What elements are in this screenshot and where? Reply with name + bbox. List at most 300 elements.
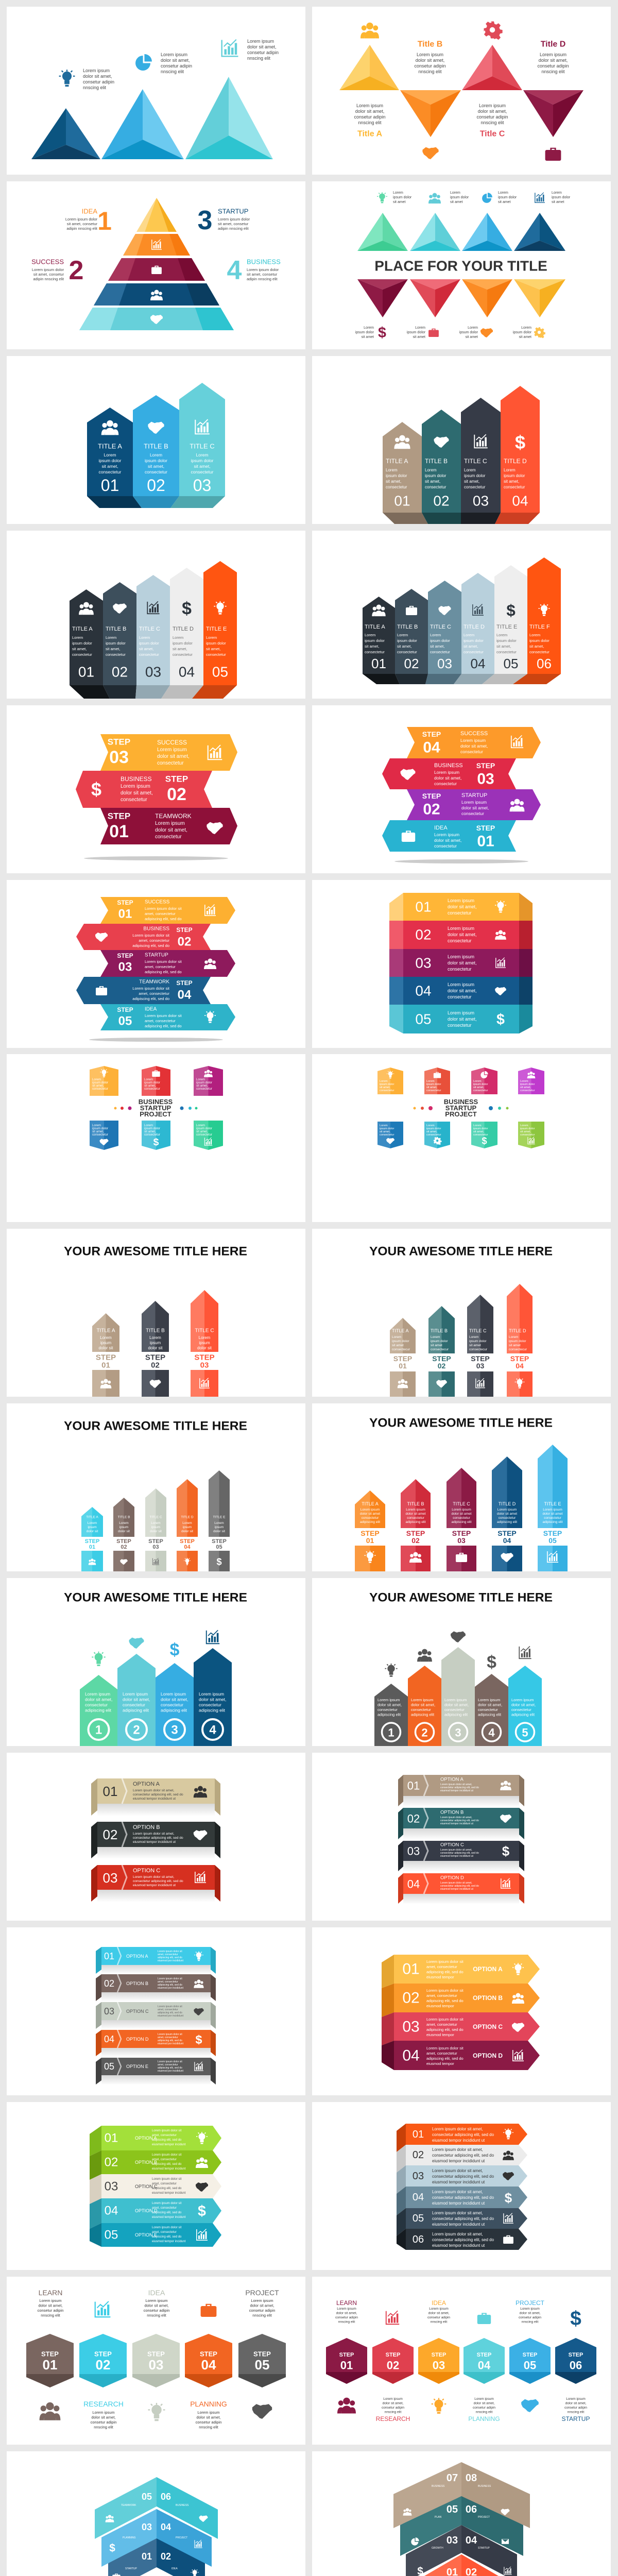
- column contents: 01: [78, 664, 94, 680]
- panel: 6 arrow columns: [312, 531, 611, 699]
- top icons row: ipsum dolor: [552, 196, 571, 199]
- chevron option E: 05: [105, 2228, 118, 2242]
- chevron 02: 02: [413, 2149, 424, 2161]
- column contents: 03: [473, 493, 489, 509]
- label 1 idea: sit amet, consetur: [67, 222, 97, 226]
- step arrows: dolor sit: [148, 1346, 163, 1350]
- bottom labels: nnscing elit: [199, 2425, 219, 2429]
- band step 01: 01: [477, 833, 494, 850]
- columns: [80, 1648, 232, 1746]
- panel: stacked blocks 01-05: [312, 880, 611, 1048]
- text B: Lorem ipsum: [417, 52, 443, 57]
- column contents: Lorem: [464, 633, 474, 637]
- layer 05/06 teal: 05: [447, 2504, 458, 2515]
- chevron option D: Lorem ipsum dolor sit: [152, 2202, 182, 2205]
- ribbon option E: eiusmod por incididunt: [158, 2070, 184, 2073]
- ribbon option B: [398, 1808, 524, 1839]
- top labels: dolor sit amet,: [336, 2311, 357, 2315]
- bottom tabs: consectetur: [426, 1133, 441, 1137]
- band step 04: consectetur: [460, 749, 483, 754]
- bottom tabs: consectetur: [92, 1133, 108, 1137]
- up triangles: [357, 213, 565, 251]
- layer 03/04 blue: 03: [142, 2522, 152, 2532]
- step labels: STEP: [510, 1354, 529, 1363]
- step labels: 01: [399, 1362, 407, 1370]
- hexagons: STEP: [477, 2352, 491, 2358]
- band step 02: $: [91, 779, 101, 800]
- band step 02: amet, consectetur: [139, 938, 169, 943]
- top tabs: [377, 1067, 544, 1094]
- chevron option B: eiusmod tempor incidunt: [152, 2167, 186, 2171]
- column contents: ipsum dolor: [72, 641, 92, 645]
- step labels: 02: [151, 1361, 160, 1369]
- bottom tabs: Lorem: [473, 1124, 482, 1127]
- band step 03: STEP: [108, 737, 130, 747]
- top labels: LEARN: [336, 2299, 357, 2307]
- columns: [374, 1647, 542, 1746]
- column contents: 02: [404, 656, 419, 671]
- step arrows: consectetur: [453, 1516, 471, 1520]
- panel: three pyramids: [7, 7, 305, 175]
- column contents: 04: [179, 664, 195, 680]
- top tabs: consectetur: [380, 1089, 394, 1092]
- step arrows: dolor sit: [87, 1529, 98, 1533]
- top tabs: ipsum dolor: [520, 1083, 535, 1086]
- step arrows: ipsum: [199, 1341, 210, 1345]
- step arrows: Lorem ipsum: [497, 1507, 517, 1512]
- column contents: ipsum dolor: [365, 638, 385, 643]
- top labels: PROJECT: [516, 2299, 545, 2307]
- band step 03: consectetur: [157, 760, 184, 766]
- icon blocks: [355, 1546, 568, 1571]
- top icons row: sit amet: [552, 200, 564, 204]
- center title: STARTUP: [140, 1104, 171, 1112]
- band step 01: IDEA: [434, 825, 448, 831]
- pyramid top: [136, 198, 177, 232]
- label 4 business: Lorem ipsum dolor: [247, 267, 279, 272]
- top icons row: sit amet: [393, 200, 406, 204]
- chevron option D: amet, consectetur: [426, 2050, 457, 2056]
- bottom tabs: ipsum dolor: [92, 1127, 108, 1130]
- step arrows: ipsum: [100, 1341, 112, 1345]
- step arrows: dolor sit: [150, 1529, 162, 1533]
- band step 05: IDEA: [145, 1007, 157, 1012]
- step labels: 03: [476, 1362, 484, 1370]
- step labels: STEP: [212, 1538, 227, 1545]
- step labels: 04: [503, 1536, 511, 1545]
- column contents: consectetur: [365, 649, 385, 654]
- columns: Lorem ipsum: [123, 1691, 148, 1697]
- step arrows: sit amet: [469, 1344, 481, 1347]
- chevron option B: 02: [402, 1990, 420, 2006]
- band step 02: Lorem ipsum: [121, 783, 150, 789]
- top icons row: [377, 191, 571, 204]
- band step 02: dolor sit amet,: [121, 790, 153, 795]
- panel: 3 arrow columns: [7, 356, 305, 524]
- bottom icons row: ipsum dolor: [459, 331, 478, 334]
- panel: awesome title 4 steps: [312, 1229, 611, 1397]
- step labels: 02: [411, 1536, 420, 1545]
- panel: layered pyramid 1-4: [7, 181, 305, 349]
- ribbon option E: Lorem ipsum dolor sit: [158, 2060, 182, 2063]
- dots: [413, 1106, 509, 1110]
- step labels: STEP: [432, 1354, 451, 1363]
- column contents: sit amet,: [139, 646, 153, 651]
- column contents: Lorem: [196, 452, 209, 457]
- hexagons: STEP: [569, 2352, 583, 2358]
- band step 01: TEAMWORK: [155, 812, 192, 820]
- column contents: consectetur: [145, 469, 167, 474]
- hexagons: 04: [201, 2357, 216, 2372]
- layer 05/06 teal: PROJECT: [478, 2516, 490, 2519]
- bottom labels: nnscing elit: [568, 2410, 584, 2414]
- band step 02: dolor sit amet,: [461, 805, 489, 810]
- column contents: ipsum dolor: [464, 473, 486, 478]
- top tabs: [90, 1066, 223, 1096]
- chevron 06: 06: [413, 2234, 424, 2245]
- block 03: consectetur: [448, 967, 472, 972]
- step arrows: adipiscing elit: [451, 1520, 472, 1524]
- bottom icons row: Lorem: [415, 326, 425, 330]
- step arrows: TITLE E: [213, 1516, 226, 1519]
- ribbon option B: OPTION B: [133, 1824, 160, 1831]
- columns: adipiscing elit: [161, 1707, 187, 1713]
- column contents: ipsum dolor: [99, 458, 122, 463]
- text block 2: Lorem ipsum: [161, 52, 187, 57]
- chevron 01: eiusmod tempor incididunt ut: [432, 2138, 485, 2142]
- columns: adipiscing elit: [511, 1712, 535, 1717]
- top tabs: consectetur: [144, 1088, 160, 1091]
- chevron option E: [90, 2223, 221, 2247]
- band step 04: STEP: [422, 730, 441, 738]
- bottom labels: consetur adipin: [564, 2406, 587, 2409]
- ribbon option C: 03: [103, 1870, 117, 1886]
- columns: dolor sit amet,: [411, 1702, 435, 1707]
- column contents: TITLE C: [139, 626, 160, 632]
- column contents: Lorem: [464, 468, 476, 472]
- chevron 04: 04: [413, 2192, 424, 2203]
- step arrows: dolor sit: [118, 1529, 130, 1533]
- ribbon option C: eiusmod tempor incididunt ut: [133, 1884, 176, 1887]
- chevron option B: adipiscing elit, sed do: [426, 1998, 464, 2003]
- step arrows: consectetur: [407, 1516, 425, 1520]
- step labels: STEP: [360, 1529, 380, 1537]
- top tabs: consectetur: [92, 1088, 108, 1091]
- hexagons: 03: [433, 2359, 445, 2372]
- step arrows: dolor sit: [181, 1529, 193, 1533]
- title B: Title B: [418, 40, 442, 48]
- label 3 startup: 3: [198, 206, 212, 235]
- chevron option B: Lorem ipsum dolor sit: [426, 1988, 464, 1993]
- chevron option E: Lorem ipsum dolor sit: [152, 2226, 182, 2229]
- chevron option D: 04: [402, 2047, 420, 2064]
- chevron option D: eiusmod tempor: [426, 2061, 454, 2066]
- bottom labels: [40, 2400, 272, 2429]
- ribbon option C: 03: [104, 2006, 114, 2016]
- step arrows: [390, 1284, 533, 1353]
- top tabs: Lorem: [380, 1080, 388, 1083]
- top labels: nnscing elit: [147, 2313, 167, 2317]
- step arrows: Lorem: [431, 1335, 440, 1338]
- chevron 05: Lorem ipsum dolor sit amet,: [432, 2210, 483, 2215]
- ribbon option A: Lorem ipsum dolor sit amet,: [133, 1789, 174, 1792]
- top labels: nnscing elit: [338, 2320, 355, 2324]
- ribbon option E: [96, 2058, 216, 2084]
- block 01: consectetur: [448, 910, 472, 916]
- ribbon option D: OPTION D: [440, 1875, 464, 1880]
- arrow columns: [363, 557, 561, 684]
- chevron 04: [397, 2187, 527, 2215]
- band step 03: adipiscing elit, sed do: [145, 970, 182, 974]
- pyramid 3: [185, 77, 273, 159]
- top labels: [38, 2289, 279, 2317]
- layer 01/02 red: [412, 2554, 511, 2576]
- panel: business startup project 6 tabs: [7, 1054, 305, 1222]
- ribbon option D: [96, 2030, 216, 2056]
- chevron option B: OPTION B: [473, 1994, 503, 2002]
- column contents: sit amet,: [496, 644, 511, 648]
- chevron option D: Lorem ipsum dolor sit: [426, 2045, 464, 2050]
- column contents: consectetur: [106, 652, 126, 656]
- center title: BUSINESS: [139, 1097, 173, 1106]
- band step 01: amet, consectetur: [145, 911, 176, 916]
- panel: 4 option ribbons: [312, 1753, 611, 1921]
- bottom tabs: consectetur: [520, 1133, 535, 1137]
- center title: BUSINESS: [444, 1097, 478, 1106]
- step arrows: ipsum dolor: [469, 1340, 487, 1343]
- step arrows: ipsum: [151, 1525, 160, 1529]
- columns: Lorem ipsum: [161, 1691, 186, 1697]
- ribbon option D: Lorem ipsum dolor sit: [158, 2033, 182, 2036]
- bottom tabs: consectetur: [196, 1133, 212, 1137]
- column contents: sit amet,: [504, 479, 519, 483]
- bottom labels: dolor sit amet,: [196, 2415, 221, 2419]
- bottom tabs: sit amet,: [144, 1130, 156, 1133]
- top tabs: Lorem: [473, 1080, 482, 1083]
- step arrows: consectecur: [469, 1348, 488, 1351]
- layer 07/08 tan: BUSINESS: [432, 2485, 445, 2488]
- text A: nnscing elit: [358, 120, 382, 125]
- step arrows: TITLE D: [181, 1516, 194, 1519]
- top labels: Lorem ipsum: [337, 2307, 356, 2310]
- icon: bulb: [59, 70, 75, 87]
- label 3 startup: adipin nnscing elit: [218, 226, 249, 231]
- step labels: 03: [200, 1361, 209, 1369]
- ribbon option A: [96, 1947, 216, 1974]
- chevron option C: 03: [402, 2019, 420, 2035]
- layer 05/06 teal: 06: [161, 2492, 171, 2502]
- band step 03: BUSINESS: [434, 762, 463, 769]
- columns: adipiscing elit: [85, 1707, 112, 1713]
- top labels: dolor sit amet,: [38, 2303, 63, 2308]
- top tabs: ipsum dolor: [426, 1083, 441, 1086]
- panel: 5 options green chevrons: [7, 2102, 305, 2270]
- hexagons: STEP: [147, 2350, 165, 2358]
- layer 05/06 teal: [400, 2494, 523, 2556]
- hexagons: 02: [96, 2357, 110, 2372]
- text block 1: nnscing elit: [83, 85, 107, 90]
- ribbon option D: OPTION D: [126, 2037, 149, 2042]
- chevron option A: amet, consectetur: [152, 2134, 177, 2137]
- hexagons: 02: [387, 2359, 399, 2372]
- columns: 2: [421, 1726, 428, 1739]
- label 4 business: sit amet, consetur: [247, 272, 278, 276]
- ribbon option D: [398, 1873, 524, 1904]
- step labels: STEP: [194, 1353, 215, 1362]
- chevron option E: eiusmod tempor incidunt: [152, 2240, 186, 2243]
- panel: awesome title 5 wide steps: [312, 1403, 611, 1571]
- chevron option C: [90, 2174, 221, 2204]
- top icons row: ipsum dolor: [393, 196, 412, 199]
- title: PLACE FOR YOUR TITLE: [374, 258, 547, 274]
- dots: [114, 1107, 198, 1110]
- columns: 1: [95, 1723, 102, 1737]
- text block 3: Lorem ipsum: [247, 39, 274, 44]
- column contents: ipsum dolor: [386, 473, 407, 478]
- chevron option A: amet, consectetur: [426, 1964, 457, 1969]
- chevron option A: OPTION A: [135, 2136, 157, 2141]
- layer 03/04 blue: [101, 2509, 212, 2567]
- column contents: sit amet,: [397, 644, 411, 648]
- ribbon option D: consectetur adipiscing elit, sed do: [440, 1885, 479, 1888]
- column contents: Lorem: [496, 633, 507, 637]
- panel: place for your title triangles: [312, 181, 611, 349]
- top tabs: sit amet,: [473, 1086, 484, 1089]
- column contents: ipsum dolor: [106, 641, 126, 645]
- ribbon option B: adipiscing elit, sed do: [158, 1984, 182, 1987]
- column contents: Lorem: [72, 635, 83, 640]
- chevron option B: Lorem ipsum dolor sit: [152, 2154, 182, 2157]
- step labels: 03: [457, 1536, 466, 1545]
- step arrows: Lorem ipsum: [452, 1507, 471, 1512]
- bottom tabs: ipsum dolor: [520, 1127, 535, 1130]
- triangle down maroon: [523, 90, 583, 137]
- step labels: [360, 1529, 562, 1545]
- title A: Title A: [357, 130, 382, 138]
- step arrows: Lorem: [214, 1521, 224, 1525]
- column contents: TITLE A: [386, 457, 408, 465]
- block 05: [389, 1005, 533, 1033]
- column contents: TITLE D: [464, 624, 485, 630]
- ribbon option B: eiusmod tempor incididunt ut: [440, 1822, 474, 1825]
- step arrows: TITLE B: [118, 1516, 130, 1519]
- chevron option B: [382, 1984, 540, 2017]
- column contents: 03: [193, 476, 211, 495]
- title: YOUR AWESOME TITLE HERE: [64, 1245, 247, 1258]
- block 03: Lorem ipsum: [448, 954, 474, 959]
- step arrows: TITLE A: [362, 1501, 379, 1506]
- block 01: 01: [415, 899, 432, 915]
- layer 05/06 teal: TEAMWORK: [121, 2504, 136, 2507]
- step labels: STEP: [85, 1538, 99, 1545]
- chevron 01: consectetur adipiscing elit, sed do: [432, 2132, 494, 2137]
- label 2 success: SUCCESS: [31, 258, 64, 266]
- column contents: consectetur: [173, 652, 193, 656]
- column contents: Lorem: [504, 468, 516, 472]
- top tabs: consectetur: [426, 1089, 441, 1092]
- column contents: 01: [101, 476, 119, 495]
- step arrows: dolor sit amet: [360, 1512, 380, 1516]
- icon: handshake: [422, 147, 439, 159]
- columns: consectetur: [161, 1702, 183, 1707]
- columns: adipiscing elit: [123, 1707, 149, 1713]
- panel: awesome title 5 thin steps: [7, 1403, 305, 1571]
- step labels: [85, 1538, 227, 1550]
- column contents: ipsum dolor: [173, 641, 193, 645]
- top labels: dolor sit amet,: [520, 2311, 541, 2315]
- icon: pie: [135, 54, 152, 71]
- band step 04: Lorem ipsum dolor sit: [132, 986, 170, 990]
- ribbon option B: amet, consectetur: [158, 1980, 178, 1984]
- down triangles: [357, 279, 565, 317]
- layer 01/02 navy: [108, 2538, 205, 2576]
- text D: consetur adipin: [537, 63, 569, 69]
- column contents: 05: [212, 664, 228, 680]
- columns: consectetur: [377, 1707, 398, 1711]
- chevron option A: eiusmod tempor: [426, 1974, 454, 1979]
- step arrows: Lorem: [119, 1521, 129, 1525]
- center title: PROJECT: [445, 1110, 477, 1118]
- columns: Lorem ipsum: [411, 1697, 433, 1702]
- panel: awesome title 4 numbered circles: [7, 1578, 305, 1746]
- hexagons: STEP: [253, 2350, 271, 2358]
- column contents: TITLE C: [464, 457, 487, 465]
- column contents: ipsum dolor: [504, 473, 525, 478]
- layer orange: [123, 234, 190, 256]
- top icons row: Lorem: [552, 191, 562, 195]
- band step 01: dolor sit amet,: [155, 827, 187, 833]
- column contents: ipsum dolor: [139, 641, 159, 645]
- layer 03/04 dark: GROWTH: [432, 2547, 443, 2550]
- step arrows: ipsum: [119, 1525, 128, 1529]
- step arrows: TITLE C: [453, 1501, 470, 1506]
- arrow columns: [70, 561, 237, 699]
- panel: 6 hexagon steps: [312, 2277, 611, 2445]
- title: YOUR AWESOME TITLE HERE: [64, 1591, 247, 1604]
- bottom labels: [337, 2397, 590, 2422]
- columns: 3: [455, 1726, 461, 1739]
- block 03: [389, 949, 533, 977]
- step arrows: consectecur: [392, 1348, 410, 1351]
- arrow columns: [383, 386, 540, 524]
- layer 07/08 tan: 08: [466, 2472, 477, 2484]
- bottom labels: nnscing elit: [385, 2410, 401, 2414]
- column contents: sit amet,: [529, 644, 544, 648]
- top labels: dolor sit amet,: [144, 2303, 169, 2308]
- block 05: consectetur: [448, 1023, 472, 1028]
- columns: Lorem ipsum: [444, 1697, 467, 1702]
- band step 01: STEP: [108, 811, 130, 821]
- column contents: TITLE A: [72, 626, 93, 632]
- top tabs: Lorem: [144, 1078, 153, 1081]
- step arrows: Lorem ipsum: [360, 1507, 380, 1512]
- hexagons: STEP: [41, 2350, 59, 2358]
- icons above: [92, 1630, 219, 1666]
- band step 04: adipiscing elit, sed do: [132, 996, 169, 1001]
- columns: consectetur: [511, 1707, 531, 1711]
- ribbon option C: [96, 2002, 216, 2029]
- column contents: Lorem: [206, 635, 217, 640]
- hexagons: STEP: [339, 2352, 354, 2358]
- column contents: 02: [112, 664, 128, 680]
- label 1 idea: IDEA: [82, 207, 97, 215]
- ribbon option B: Lorem ipsum dolor sit amet,: [440, 1816, 472, 1819]
- column contents: consectetur: [464, 484, 486, 489]
- layer maroon: [108, 258, 205, 281]
- text block 1: consetur adipin: [83, 79, 114, 84]
- panel: 4 options 3D chevrons: [312, 1927, 611, 2095]
- band step 05: Lorem ipsum dolor sit: [145, 1013, 182, 1018]
